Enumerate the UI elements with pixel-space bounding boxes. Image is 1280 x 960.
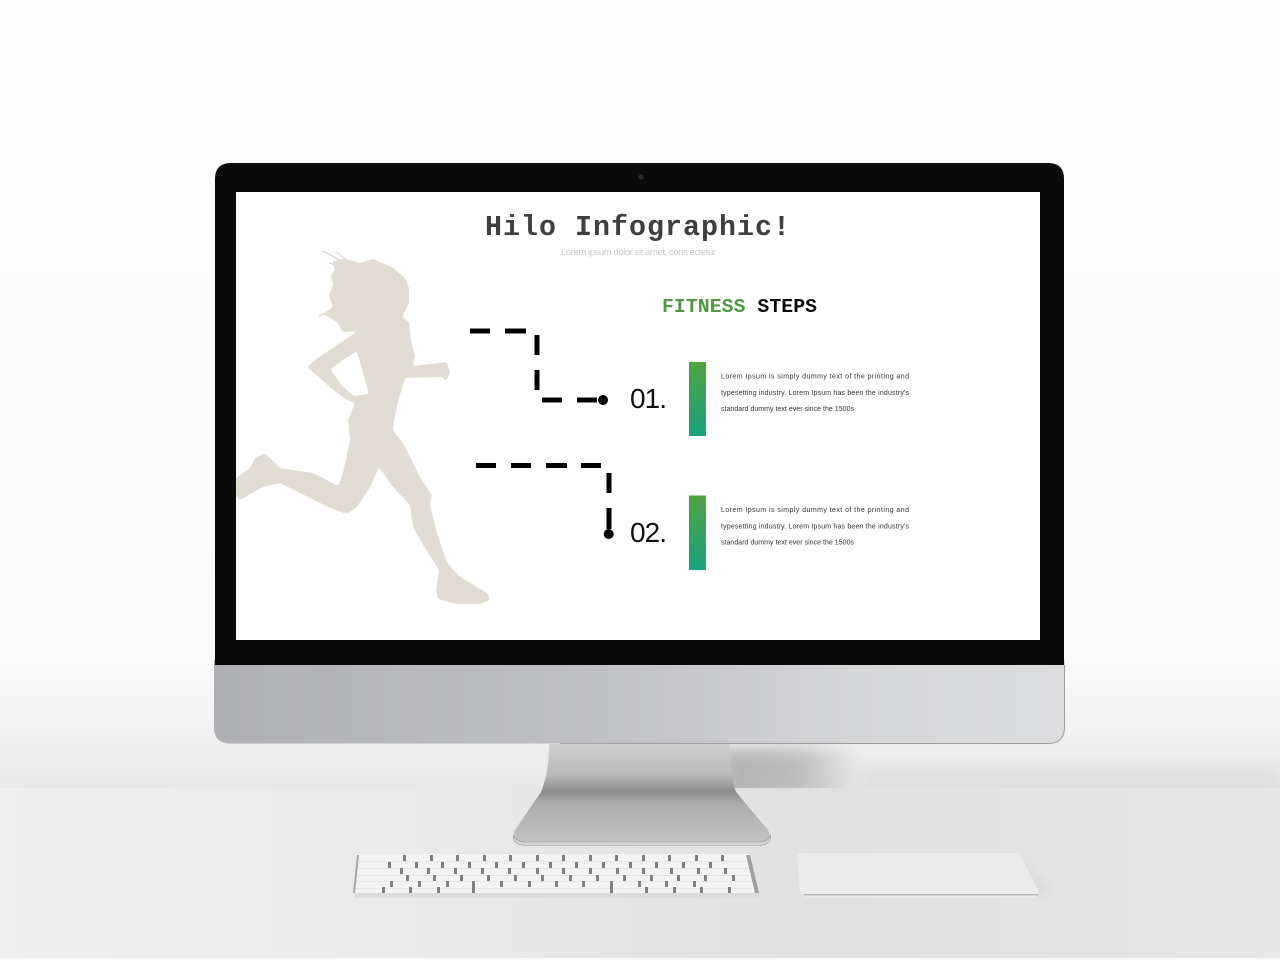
gradient bar 2 xyxy=(689,496,706,570)
text block 2 xyxy=(721,507,910,546)
text block 2: standard dummy text ever since the 1500s xyxy=(721,540,854,546)
dashed connector 1 xyxy=(470,328,608,405)
text block 2: typesetting industry. Lorem Ipsum has been the industry's xyxy=(721,524,910,530)
monitor bezel xyxy=(215,163,1064,665)
dashed connector 2 xyxy=(476,463,614,539)
trackpad xyxy=(797,853,1052,898)
text block 1: standard dummy text ever since the 1500s xyxy=(721,406,854,413)
text block 1 xyxy=(721,374,910,413)
text block 2: Lorem Ipsum is simply dummy text of the printing and xyxy=(721,507,909,514)
webcam xyxy=(638,174,644,180)
title: Hilo Infographic! xyxy=(485,212,790,244)
monitor chin xyxy=(214,660,1065,744)
runner silhouette xyxy=(236,251,490,604)
screen xyxy=(236,192,1040,640)
number 02: 02. xyxy=(630,517,667,548)
text block 1: Lorem Ipsum is simply dummy text of the printing and xyxy=(721,374,909,380)
subtitle: Lorem ipsum dolor sit amet, cons ectetur xyxy=(561,247,716,258)
keyboard xyxy=(353,854,759,898)
monitor stand xyxy=(513,744,771,846)
text block 1: typesetting industry. Lorem Ipsum has been the industry's xyxy=(721,390,910,397)
chin edge xyxy=(560,665,1064,744)
number 01: 01. xyxy=(630,383,667,414)
gradient bar 1 xyxy=(689,362,706,436)
heading: fitness steps: FITNESS STEPS xyxy=(662,296,817,318)
monitor xyxy=(214,163,1065,744)
